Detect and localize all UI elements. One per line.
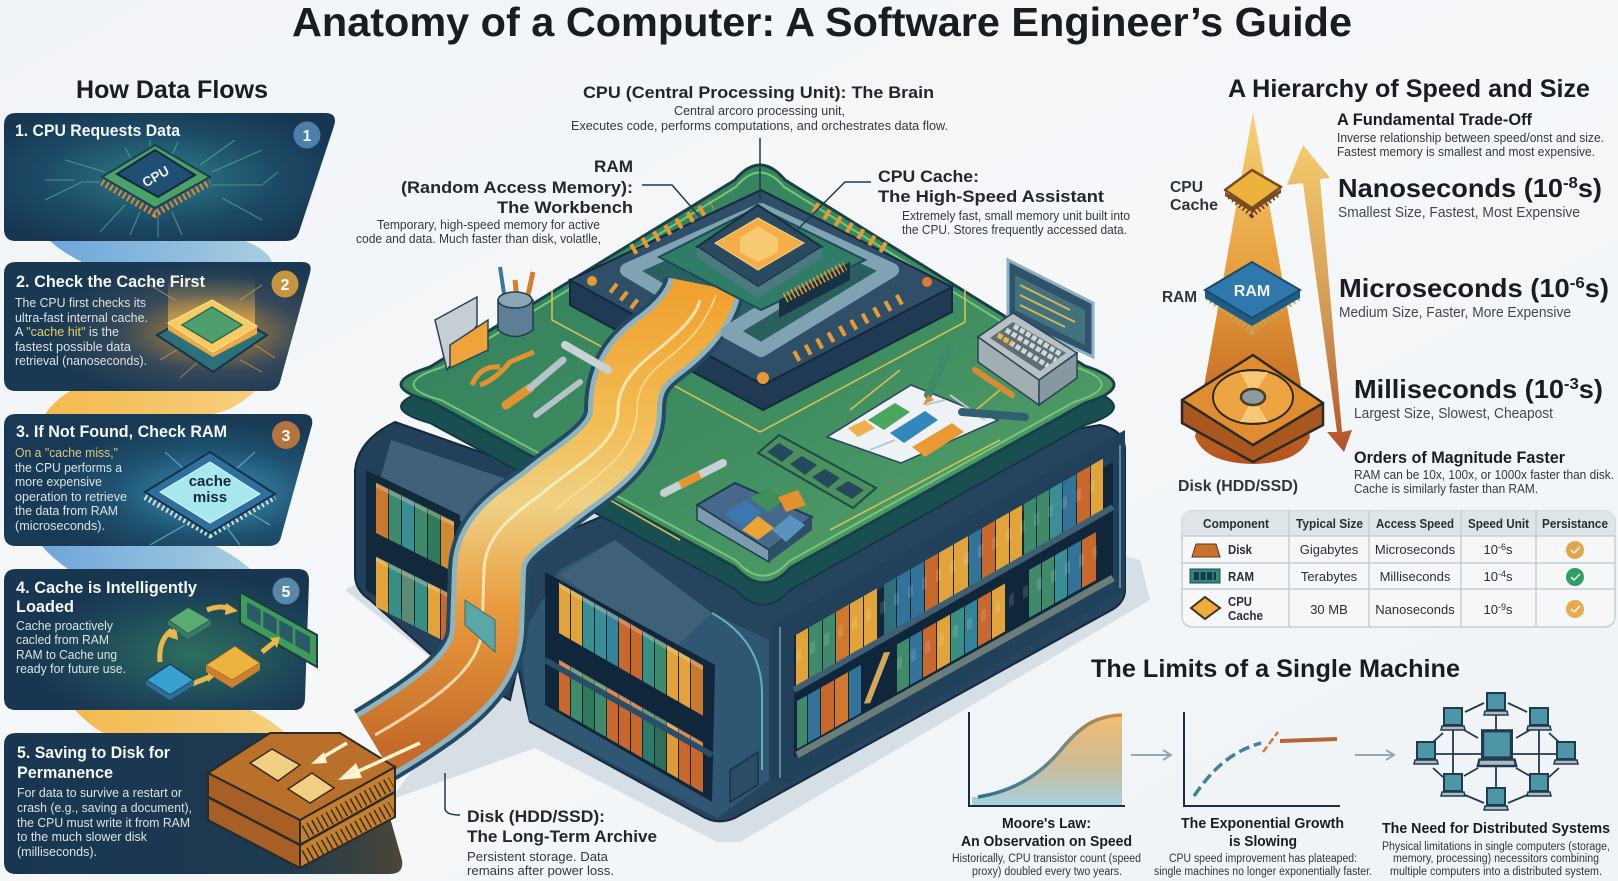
row: disk: -6 <box>1498 542 1506 552</box>
left bookcase cabinet <box>355 422 560 700</box>
row: disk: Disk <box>1228 542 1253 557</box>
heading: limits: The Limits of a Single Machine <box>1091 655 1460 683</box>
cpu socket base <box>570 190 952 410</box>
books upper left <box>376 483 454 572</box>
badge 2 <box>272 270 298 298</box>
table header: Persistance <box>1542 516 1608 531</box>
text: nanoseconds: Nanoseconds (10 <box>1338 173 1553 203</box>
label: cpu: CPU (Central Processing Unit): The Brain <box>583 83 934 102</box>
body text: the CPU performs a <box>15 460 123 475</box>
node: left <box>1414 742 1438 764</box>
node: top right <box>1527 708 1551 730</box>
paper and pencils <box>827 348 1025 463</box>
node: top left <box>1441 708 1465 730</box>
floor shadow <box>345 500 1150 842</box>
badge 2: 2 <box>281 277 290 294</box>
arrow <box>1131 750 1171 760</box>
icon: cpu chip: CPU <box>140 163 172 190</box>
row: cpu cache: Cache <box>1228 608 1263 623</box>
text: nanoseconds: Smallest Size, Fastest, Most Expensive <box>1338 205 1580 221</box>
text: nanoseconds: s) <box>1578 173 1602 203</box>
panel: step 2 check the cache: 2. Check the Cache First <box>16 273 205 291</box>
center computer <box>1478 731 1516 766</box>
panel: step 5 saving to disk: 5. Saving to Disk for <box>17 744 171 762</box>
panel: step 4 cache loaded <box>4 569 317 710</box>
panel: step 2 check the cache <box>4 262 311 391</box>
caption: distributed systems: The Need for Distributed Systems <box>1382 820 1610 837</box>
heading: how data flows: How Data Flows <box>76 76 268 104</box>
panel: step 5 saving to disk: Permanence <box>17 764 113 782</box>
row: cpu cache: s <box>1506 602 1513 617</box>
label: disk: Persistent storage. Data <box>467 850 608 864</box>
caption: distributed systems <box>1382 820 1610 878</box>
text: trade-off: A Fundamental Trade-Off <box>1337 111 1532 129</box>
text: trade-off: Fastest memory is smallest and most expensive. <box>1337 145 1595 159</box>
text: orders of magnitude <box>1354 449 1614 496</box>
body text: A "cache hit" is the <box>15 324 119 339</box>
label: disk <box>445 773 657 878</box>
row: disk: Gigabytes <box>1300 542 1359 557</box>
body text <box>15 295 148 368</box>
speed cone <box>1195 112 1310 464</box>
hierarchy labels <box>1162 179 1298 495</box>
caption: exponential growth slowing: is Slowing <box>1229 833 1297 850</box>
body text <box>16 618 126 676</box>
hierarchy labels: RAM <box>1162 289 1197 306</box>
row: ram: s <box>1506 569 1513 584</box>
table header: Typical Size <box>1296 516 1363 531</box>
node: bottom <box>1484 788 1508 810</box>
text: microseconds: Microseconds (10 <box>1339 273 1559 303</box>
row: ram: Milliseconds <box>1380 569 1451 584</box>
caption: exponential growth slowing: single machines no longer exponentially faster. <box>1154 866 1372 878</box>
body text: Cache proactively <box>16 618 113 633</box>
body text: fastest possible data <box>15 339 132 354</box>
node: bottom left <box>1441 774 1465 796</box>
row: cpu cache: -9 <box>1498 602 1506 612</box>
row: ram: RAM <box>1228 569 1254 584</box>
panel: step 3 check ram <box>4 414 312 546</box>
text: microseconds: -6 <box>1570 275 1585 292</box>
row: disk: s <box>1506 542 1513 557</box>
node: top <box>1484 693 1508 715</box>
label: cpu cache: CPU Cache: <box>878 167 979 186</box>
books right lower <box>797 532 1097 749</box>
label: cpu cache: Extremely fast, small memory unit built into <box>902 209 1130 223</box>
body text: On a "cache miss," <box>15 445 118 460</box>
caption: moore's law <box>952 815 1141 878</box>
title: Anatomy of a Computer: A Software Engineer’s Guide <box>292 0 1352 45</box>
body text: more expensive <box>15 474 102 489</box>
row: disk: 10 <box>1484 542 1498 557</box>
row: ram: -4 <box>1498 569 1506 579</box>
table header <box>1203 516 1608 531</box>
text: orders of magnitude: Cache is similarly faster than RAM. <box>1354 482 1538 496</box>
text: milliseconds: Milliseconds (10 <box>1354 374 1555 404</box>
row: cpu cache: CPU <box>1228 594 1252 609</box>
body text <box>15 445 127 533</box>
flow connectors <box>42 241 285 733</box>
body text: operation to retrieve <box>15 489 127 504</box>
caption: distributed systems: multiple computers into a distributed system. <box>1390 866 1602 878</box>
hierarchy labels: CPU <box>1170 179 1203 196</box>
body text: (milliseconds). <box>17 844 97 859</box>
text: milliseconds: s) <box>1579 374 1603 404</box>
body text: RAM to Cache ung <box>16 647 117 662</box>
row: ram <box>1190 568 1584 586</box>
body text <box>17 785 192 859</box>
laptop <box>978 260 1093 405</box>
label: cpu: Executes code, performs computations, and orchestrates data flow. <box>571 119 948 133</box>
body text: the CPU must write it from RAM <box>17 815 190 830</box>
icon: glowing cache chip <box>150 277 275 378</box>
text: milliseconds <box>1354 374 1603 422</box>
right bookcase cabinet <box>500 425 1125 821</box>
row: disk <box>1192 541 1584 559</box>
row: cpu cache <box>1191 594 1584 623</box>
caption: exponential growth slowing: The Exponential Growth <box>1181 815 1344 832</box>
text: microseconds: Medium Size, Faster, More Expensive <box>1339 305 1571 321</box>
illustration: computer as workshop <box>355 165 1125 821</box>
text: orders of magnitude: Orders of Magnitude Faster <box>1354 449 1566 467</box>
panel: step 5 saving to disk <box>4 733 402 874</box>
green workbench board <box>401 165 1114 605</box>
body text: the data from RAM <box>15 503 118 518</box>
comparison table <box>1182 511 1615 627</box>
caption: moore's law: Historically, CPU transistor count (speed <box>952 853 1141 865</box>
badge 3: 3 <box>282 428 291 445</box>
text: trade-off: Inverse relationship between speed/onst and size. <box>1337 131 1604 145</box>
disk box at end of the path <box>208 733 420 868</box>
text: microseconds: s) <box>1585 273 1609 303</box>
label: ram: RAM <box>594 157 633 176</box>
ram stick <box>758 435 876 508</box>
label: cpu cache: the CPU. Stores frequently accessed data. <box>902 223 1127 237</box>
label: ram: (Random Access Memory): <box>401 178 633 197</box>
arrows <box>318 743 420 775</box>
badge 1 <box>294 122 320 148</box>
books lower left <box>376 557 454 646</box>
vent <box>730 752 758 802</box>
row: ram: Terabytes <box>1301 569 1358 584</box>
board traces <box>552 290 1000 540</box>
row: cpu cache: 10 <box>1484 602 1498 617</box>
caption: moore's law: An Observation on Speed <box>961 833 1132 850</box>
blocks and pen <box>664 463 812 562</box>
network diagram <box>1414 693 1578 810</box>
icon: cpu chip <box>102 145 210 214</box>
row: ram: 10 <box>1484 569 1498 584</box>
label: disk: The Long-Term Archive <box>467 827 657 846</box>
text: milliseconds: Largest Size, Slowest, Cheapost <box>1354 406 1553 422</box>
body text: ready for future use. <box>16 661 126 676</box>
icon: cache miss chip: cache <box>189 473 231 490</box>
body text: to the much slower disk <box>17 829 147 844</box>
cache cube <box>715 218 804 270</box>
panel: step 4 cache loaded: Loaded <box>16 598 74 616</box>
caption: distributed systems: memory, processing) necessitors combining <box>1393 853 1599 865</box>
label: ram: code and data. Much faster than disk, volatlle, <box>356 232 601 246</box>
badge 3 <box>272 421 300 449</box>
row: disk: Microseconds <box>1375 542 1456 557</box>
table header: Speed Unit <box>1468 516 1530 531</box>
heading: hierarchy: A Hierarchy of Speed and Size <box>1228 75 1590 103</box>
data path <box>375 285 716 745</box>
books front left lower <box>559 660 703 793</box>
icon: cache miss chip: miss <box>193 489 227 506</box>
body text: retrieval (nanoseconds). <box>15 353 147 368</box>
row: cpu cache: Nanoseconds <box>1375 602 1455 617</box>
label: cpu cache <box>794 167 1130 237</box>
body text: (microseconds). <box>15 518 105 533</box>
panel: step 3 check ram: 3. If Not Found, Check RAM <box>16 423 227 441</box>
label: ram <box>356 157 700 246</box>
hierarchy labels: Disk (HDD/SSD) <box>1178 478 1298 495</box>
caption: moore's law: proxy) doubled every two years. <box>972 866 1122 878</box>
books right upper <box>796 459 1103 687</box>
text: nanoseconds <box>1338 173 1602 221</box>
row: cpu cache: 30 MB <box>1310 602 1348 617</box>
chart: slowing growth <box>1184 712 1340 806</box>
badge 5: 5 <box>282 584 291 601</box>
body text: The CPU first checks its <box>15 295 146 310</box>
text: trade-off <box>1337 111 1604 159</box>
arrow <box>1355 750 1394 760</box>
node: bottom right <box>1527 774 1551 796</box>
icon: cache miss chip <box>145 452 275 545</box>
label: disk: remains after power loss. <box>467 864 614 878</box>
badge 5 <box>272 578 300 604</box>
data packet <box>465 600 495 652</box>
speed arrow <box>1287 145 1352 452</box>
label: disk: Disk (HDD/SSD): <box>467 807 605 826</box>
caption: exponential growth slowing <box>1154 815 1372 878</box>
badge 1: 1 <box>303 128 312 145</box>
body text: crash (e.g., saving a document), <box>17 800 192 815</box>
chart: moore's law curve <box>969 712 1125 806</box>
caption: moore's law: Moore's Law: <box>1002 815 1091 832</box>
panel: step 4 cache loaded: 4. Cache is Intelligently <box>16 579 198 597</box>
icon: cache loading cycle <box>146 592 317 700</box>
icon: disk drive <box>1182 355 1323 462</box>
body text: ultra-fast internal cache. <box>15 310 148 325</box>
body text: For data to survive a restart or <box>17 785 183 800</box>
files <box>250 749 300 781</box>
label: ram: Temporary, high-speed memory for active <box>377 218 600 232</box>
text: milliseconds: -3 <box>1564 376 1579 393</box>
label: cpu <box>571 83 948 200</box>
icon: cpu cache chip <box>1225 170 1281 214</box>
desk items: folder, cup, tools <box>435 267 608 415</box>
caption: exponential growth slowing: CPU speed improvement has plateaped: <box>1169 853 1357 865</box>
label: cpu: Central arcoro processing unit, <box>674 104 845 118</box>
books front left upper <box>559 583 703 716</box>
label: ram: The Workbench <box>497 198 633 217</box>
icon: ram chip <box>1205 262 1300 330</box>
label: cpu cache: The High-Speed Assistant <box>878 187 1104 206</box>
cpu core stack <box>659 205 892 350</box>
table header: Component <box>1203 516 1270 531</box>
hierarchy labels: Cache <box>1170 197 1218 214</box>
text: nanoseconds: -8 <box>1563 175 1578 192</box>
panel: step 1 cpu requests data: 1. CPU Requests Data <box>15 122 181 140</box>
body text: cacled from RAM <box>16 632 109 647</box>
text: microseconds <box>1339 273 1609 321</box>
icon: ram chip: RAM <box>1234 283 1270 300</box>
table header: Access Speed <box>1376 516 1454 531</box>
circuit traces <box>45 140 278 238</box>
node: right <box>1554 742 1578 764</box>
panel: step 1 cpu requests data <box>4 113 335 241</box>
